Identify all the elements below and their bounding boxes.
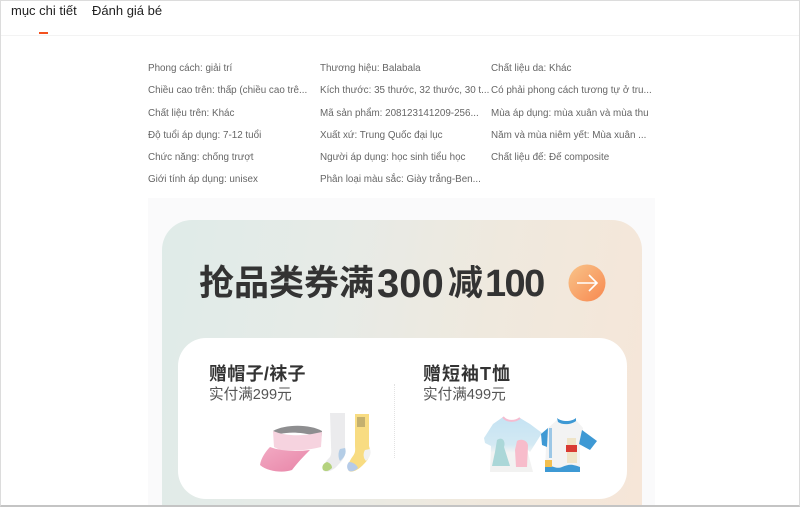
gift 2 heading: 赠短袖T恤 — [423, 364, 511, 384]
icon: arrow button — [568, 264, 606, 302]
active tab indicator — [39, 32, 48, 34]
product attributes: Năm và mùa niêm yết: Mùa xuân ... — [491, 130, 646, 141]
illustration: visor and socks — [260, 413, 370, 472]
blue and white t-shirt — [541, 418, 597, 472]
product attributes — [148, 63, 652, 185]
gift 2 threshold: 实付满499元 — [423, 387, 506, 403]
promo title: 抢品类券满 — [199, 264, 374, 303]
product attributes: Chất liệu da: Khác — [491, 63, 571, 74]
promo title: 300 — [377, 262, 444, 306]
product attributes: Chất liệu trên: Khác — [148, 108, 234, 119]
promo image background — [148, 198, 655, 507]
product attributes: Phân loại màu sắc: Giày trắng-Ben... — [320, 174, 481, 185]
promo title — [199, 262, 544, 306]
product attributes: Chức năng: chống trượt — [148, 152, 254, 163]
tab: reviews: Đánh giá bé — [92, 3, 162, 18]
product attributes: Độ tuổi áp dụng: 7-12 tuổi — [148, 130, 261, 141]
product attributes: Xuất xứ: Trung Quốc đại lục — [320, 130, 443, 141]
product attributes: Chiều cao trên: thấp (chiều cao trê... — [148, 85, 307, 96]
pastel t-shirt — [484, 417, 542, 472]
illustration: t-shirts — [484, 416, 597, 472]
product attributes: Có phải phong cách tương tự ở tru... — [491, 85, 652, 96]
white sock — [322, 413, 346, 472]
product attributes: Phong cách: giải trí — [148, 63, 232, 74]
product attributes: Thương hiệu: Balabala — [320, 63, 421, 74]
gift 1 threshold: 实付满299元 — [209, 387, 292, 403]
product attributes: Mùa áp dụng: mùa xuân và mùa thu — [491, 108, 649, 119]
promo title: 100 — [485, 263, 544, 305]
promo gradient card — [162, 220, 642, 507]
product attributes: Kích thước: 35 thước, 32 thước, 30 t... — [320, 85, 489, 96]
yellow sock — [347, 414, 371, 472]
visor cap — [260, 426, 322, 472]
tab: details: mục chi tiết — [11, 3, 77, 18]
dotted divider — [394, 384, 395, 458]
product attributes: Người áp dụng: học sinh tiểu học — [320, 152, 465, 163]
gift 1 heading: 赠帽子/袜子 — [209, 364, 306, 384]
tab bar — [0, 0, 800, 36]
product attributes: Chất liệu đế: Đế composite — [491, 152, 609, 163]
product attributes: Mã sản phẩm: 208123141209-256... — [320, 108, 479, 119]
promo title: 减 — [448, 264, 483, 303]
white gift panel — [178, 338, 627, 499]
product attributes: Giới tính áp dụng: unisex — [148, 174, 258, 185]
